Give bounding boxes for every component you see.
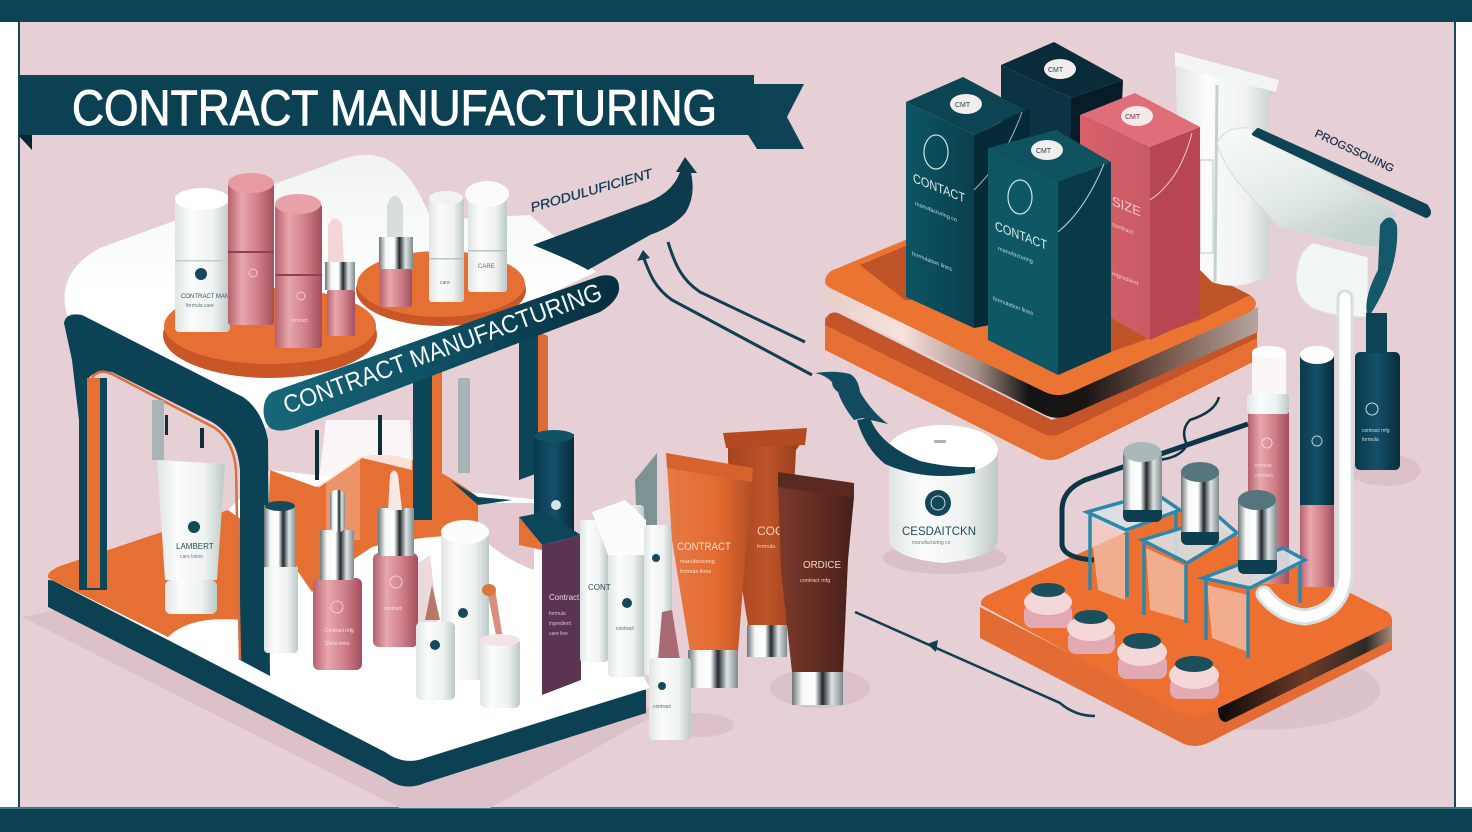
hanging nozzles xyxy=(152,378,470,480)
teal box left: CONTACT xyxy=(913,170,965,206)
tall pink bottle xyxy=(228,173,274,325)
upper shelf with cosmetics xyxy=(163,173,526,378)
teal box front: CONTACT xyxy=(995,218,1047,253)
tall white bottle xyxy=(441,520,489,680)
teal box front: manufacturing xyxy=(998,246,1033,265)
chrome bottle xyxy=(264,501,298,653)
white bottle xyxy=(175,188,230,332)
teal box front xyxy=(988,130,1111,375)
mid pink bottle xyxy=(275,194,322,348)
brown tube xyxy=(770,472,870,708)
base shadow xyxy=(22,560,660,808)
tall bottles behind stands xyxy=(1247,313,1421,587)
banner text: CONTRACT MANUFACTURING xyxy=(279,278,606,420)
white upper deck and hump xyxy=(65,155,596,430)
lower right platform xyxy=(980,510,1392,746)
purple box: formula xyxy=(549,611,566,617)
teal box front: formulation lines xyxy=(993,296,1033,317)
pink dropper 2: contract xyxy=(384,606,402,612)
orange applicator xyxy=(480,584,520,708)
dark navy box rear: CMT xyxy=(1048,67,1064,74)
teal box left xyxy=(906,77,1030,328)
jar label: CESDAITCKN xyxy=(902,524,976,538)
white cylinder front xyxy=(429,191,464,302)
orange tube: manufacturing xyxy=(680,559,715,565)
jar 1 xyxy=(1024,583,1072,628)
small front bottle: contract xyxy=(653,704,671,710)
up arrow ribbon xyxy=(533,157,697,270)
upper slab top xyxy=(825,189,1256,395)
cream jar: manufacturing co xyxy=(912,540,951,546)
orange tube: CONTRACT xyxy=(677,541,731,553)
teal bar xyxy=(1254,130,1429,216)
dark orange tube xyxy=(723,428,807,657)
lower left product group xyxy=(157,428,870,740)
label: processing: PROGSSOUING xyxy=(1313,128,1396,175)
left arch and leg xyxy=(64,314,270,676)
white products cluster: CONT xyxy=(588,583,611,592)
white cylinder front: care xyxy=(440,280,450,286)
white products cluster: contract xyxy=(616,626,634,632)
pink dropper 1 xyxy=(313,490,362,670)
navy bottle: contract mfg xyxy=(1362,428,1390,434)
purple box: ingredient xyxy=(549,621,572,627)
small front bottle xyxy=(649,610,734,740)
stand 3 xyxy=(1203,548,1305,658)
white bottle: CONTRACT MAN xyxy=(181,294,229,300)
rear pillars xyxy=(79,330,548,660)
coral box: ingredient xyxy=(1112,270,1139,288)
jar 4 xyxy=(1169,656,1219,699)
lower slab xyxy=(825,312,1257,460)
jar 3 xyxy=(1117,633,1167,679)
stand 2 xyxy=(1142,517,1237,623)
white bottle: formula care xyxy=(186,303,214,309)
cables xyxy=(1062,397,1248,560)
label: produlficient: PRODULUFICIENT xyxy=(529,165,655,215)
purple box: Contract xyxy=(549,593,580,602)
brown tube: contract mfg xyxy=(800,578,830,584)
swoosh ribbon into cream jar xyxy=(815,372,888,424)
cream jar xyxy=(857,418,1007,574)
teal fin xyxy=(1366,218,1397,318)
pink dropper 2 xyxy=(373,470,418,647)
white tube and nozzle behind boxes xyxy=(1175,52,1429,318)
white cylinder rear xyxy=(465,181,509,292)
purple box xyxy=(519,512,581,695)
tube xyxy=(1175,52,1279,286)
upper slab edge xyxy=(825,277,1258,418)
pink tall bottle xyxy=(1247,346,1289,584)
jar ribbon xyxy=(857,418,975,476)
glass stands with chrome caps xyxy=(1087,298,1345,658)
dark navy cap bottle xyxy=(534,430,574,534)
orange tube: formula lines xyxy=(680,569,711,575)
coral box: SIZE xyxy=(1112,193,1141,219)
pink dropper 1: Contract mfg xyxy=(325,628,354,634)
jar 2 xyxy=(1067,610,1115,654)
dark orange tube: COC xyxy=(757,524,784,538)
title ribbon xyxy=(18,75,804,150)
small pink dropper xyxy=(325,218,355,336)
stand 1 xyxy=(1087,493,1180,600)
white tube xyxy=(157,460,225,614)
chrome cap 1 xyxy=(1123,442,1162,522)
chrome cap 2 xyxy=(1181,462,1219,545)
small pink jars xyxy=(1024,583,1219,699)
orange dish right xyxy=(356,251,526,326)
base platform xyxy=(48,455,650,787)
mid pink bottle: contract xyxy=(290,318,308,324)
left production machine xyxy=(22,155,660,808)
glass enclosure xyxy=(318,420,412,540)
orange dish left xyxy=(163,288,377,378)
navy bottle: formula xyxy=(1362,437,1379,443)
navy and pink tall bottle xyxy=(1300,346,1334,587)
coral box: CMT xyxy=(1125,114,1141,121)
navy bottle xyxy=(1349,313,1421,486)
coral box xyxy=(1080,93,1200,340)
coral box: contract xyxy=(1112,221,1134,237)
pink tall bottle: contract xyxy=(1255,473,1273,479)
upper right platform xyxy=(825,189,1258,460)
brown tube: ORDICE xyxy=(803,560,841,571)
dark orange tube: formula xyxy=(757,544,776,550)
white round blob xyxy=(1296,243,1368,317)
white pipe xyxy=(1264,298,1345,617)
white products cluster xyxy=(580,500,672,677)
lower arrow line xyxy=(855,612,1095,716)
pink tall bottle: formula xyxy=(1255,463,1272,469)
ribbon banner: contract manufacturing xyxy=(264,275,619,431)
teal box front: CMT xyxy=(1036,148,1052,155)
teal box left: CMT xyxy=(955,102,971,109)
teal box left: formulation lines xyxy=(912,251,952,273)
dropper bottle xyxy=(379,196,413,307)
pink dropper 1: Shine lines xyxy=(325,641,350,647)
brush bottle xyxy=(416,585,455,700)
chrome cap 3 xyxy=(1238,490,1277,574)
purple box: care line xyxy=(549,631,568,637)
nozzle wedge xyxy=(1217,128,1397,247)
white tube: LAMBERT xyxy=(176,542,214,551)
orange tube xyxy=(666,453,753,688)
grey pen tip xyxy=(635,453,657,530)
dark navy box rear xyxy=(1001,42,1123,200)
white cylinder rear: CARE xyxy=(478,264,495,270)
white tube: care lotion xyxy=(180,554,203,560)
title text: CONTRACT MANUFACTURING xyxy=(72,80,717,136)
arrows between stages xyxy=(637,242,812,375)
teal box left: manufacturing co xyxy=(915,201,957,224)
